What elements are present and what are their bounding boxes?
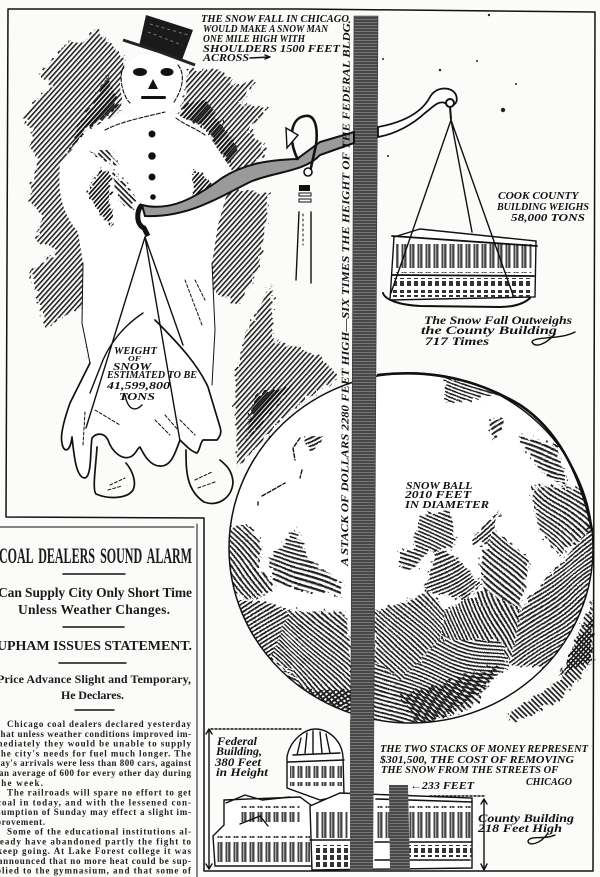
caption: federal building height: Federal — [216, 736, 258, 748]
article body text: keep going. At Lake Forest college it was — [0, 846, 191, 856]
caption: snow outweighs building: 717 Times — [425, 336, 490, 348]
caption: weight of snow: SNOW — [113, 362, 153, 373]
caption: snow man: THE SNOW FALL IN CHICAGO — [201, 14, 349, 25]
background hatching behind snowman — [21, 28, 596, 676]
head and collar texture — [105, 65, 205, 135]
article body text: plied to the gymnasium, and that some of — [0, 866, 192, 876]
newspaper article — [0, 524, 197, 877]
caption: snow ball: IN DIAMETER — [404, 500, 489, 511]
caption: snow man: WOULD MAKE A SNOW MAN — [203, 24, 329, 35]
snowman body — [59, 113, 235, 478]
caption: snow ball: SNOW BALL — [406, 481, 472, 492]
right ring — [446, 99, 454, 107]
globe dashed contour marks — [258, 438, 302, 505]
stack of dollars — [350, 16, 378, 871]
height marker: county building — [430, 796, 487, 870]
article subhead one: Unless Weather Changes. — [18, 602, 170, 617]
vertical caption: stack of dollars: A STACK OF DOLLARS 2280 FEET HIGH—SIX TIMES THE HEIGHT OF THE FEDERAL BLDG. — [340, 20, 353, 567]
caption: snow outweighs building: the County Building — [421, 325, 557, 337]
article headline: COAL DEALERS SOUND ALARM — [0, 543, 192, 568]
balance scale — [86, 88, 513, 441]
Cook County building on scale — [383, 229, 537, 307]
right pan cords — [391, 120, 513, 295]
right hanger link — [450, 107, 451, 119]
flourish: snow outweighs caption — [532, 332, 575, 345]
caption: cost of removing snow: THE SNOW FROM THE STREETS OF — [381, 765, 559, 776]
snowball globe — [228, 372, 594, 724]
newsprint specks — [382, 14, 517, 157]
right beam arm — [378, 88, 457, 137]
caption: county building height: County Building — [478, 813, 574, 825]
shadow crescent below globe — [504, 600, 595, 722]
article body text: day's arrivals were less than 800 cars, against — [0, 758, 191, 768]
left beam arm — [142, 132, 354, 216]
label: stack height: ←233 FEET — [410, 781, 475, 792]
article body text: coal in today, and with the lessened con- — [0, 798, 191, 808]
caption: weight of snow: ESTIMATED TO BE — [106, 370, 197, 381]
caption: Cook County building weight: BUILDING WEIGHS — [496, 202, 589, 213]
left hook — [138, 205, 148, 236]
article body text: the city's needs for fuel much longer. The — [0, 748, 191, 758]
article subhead two: UPHAM ISSUES STATEMENT. — [0, 639, 192, 654]
article body text: Chicago coal dealers declared yesterday — [7, 719, 192, 729]
arm shading — [86, 150, 212, 228]
snowman cloak texture — [83, 280, 215, 490]
caption: snow man: SHOULDERS 1500 FEET — [203, 44, 341, 55]
snowman buttons — [148, 130, 156, 200]
caption: Cook County building weight: 58,000 TONS — [511, 213, 586, 224]
snowman feet — [94, 447, 233, 503]
County Building — [310, 793, 472, 870]
article body text: mediately they would be unable to supply — [0, 738, 192, 748]
snowman cloak lines — [90, 313, 143, 409]
caption: snow man: ACROSS — [202, 53, 250, 64]
caption: county building height: 218 Feet High — [477, 823, 562, 835]
stack of dollars overlapping building — [350, 720, 374, 871]
snowman cloak hem — [61, 320, 221, 478]
caption: Cook County building weight: COOK COUNTY — [498, 191, 579, 202]
article subhead three: Price Advance Slight and Temporary, — [0, 672, 191, 686]
caption: snow man: ONE MILE HIGH WITH — [203, 34, 306, 45]
article body text: The railroads will spare no effort to get — [7, 788, 191, 798]
article subhead one: Can Supply City Only Short Time — [0, 585, 192, 600]
snowman — [59, 15, 234, 504]
caption: weight of snow: TONS — [119, 392, 156, 403]
caption: cost of removing snow: CHICAGO — [526, 777, 572, 788]
article body text: sumption of Sunday may effect a slight im- — [0, 807, 191, 817]
caption: snow ball: 2010 FEET — [404, 490, 472, 501]
caption: snow outweighs building: The Snow Fall Outweighs — [424, 315, 573, 327]
snowman head — [120, 53, 184, 117]
Federal Building — [213, 729, 344, 866]
caption: federal building height: in Height — [216, 767, 269, 779]
flourish: county building caption — [528, 833, 555, 844]
article body text: that unless weather conditions improved im- — [0, 729, 191, 739]
globe shading patches — [229, 378, 593, 723]
caption: weight of snow: WEIGHT — [114, 346, 158, 357]
article body text: announced that no more heat could be sup- — [0, 856, 191, 866]
snowman top hat — [123, 15, 195, 65]
snowman body edges — [82, 263, 215, 385]
scale pointer hook — [286, 116, 317, 283]
caption: weight of snow: OF — [128, 355, 141, 363]
caption: weight of snow: 41,599,800 — [106, 381, 170, 392]
article body text: ready have abandoned partly the fight to — [0, 836, 192, 846]
caption: federal building height: 380 Feet — [214, 757, 262, 769]
article subhead three: He Declares. — [61, 688, 124, 702]
caption: cost of removing snow: THE TWO STACKS OF MONEY REPRESENT — [380, 744, 589, 755]
height marker: federal building — [206, 729, 303, 869]
caption: cost of removing snow: $301,500, THE COST OF REMOVING — [379, 755, 575, 766]
arrow: snow man caption — [250, 55, 270, 59]
article rules — [0, 524, 197, 877]
article body text: Some of the educational institutions al- — [7, 826, 191, 836]
article body text: an average of 600 for every other day during — [0, 768, 192, 778]
left pan cords — [86, 237, 183, 441]
caption: federal building height: Building, — [215, 746, 262, 758]
snowman face — [133, 68, 174, 99]
second stack of dollars — [389, 785, 410, 871]
